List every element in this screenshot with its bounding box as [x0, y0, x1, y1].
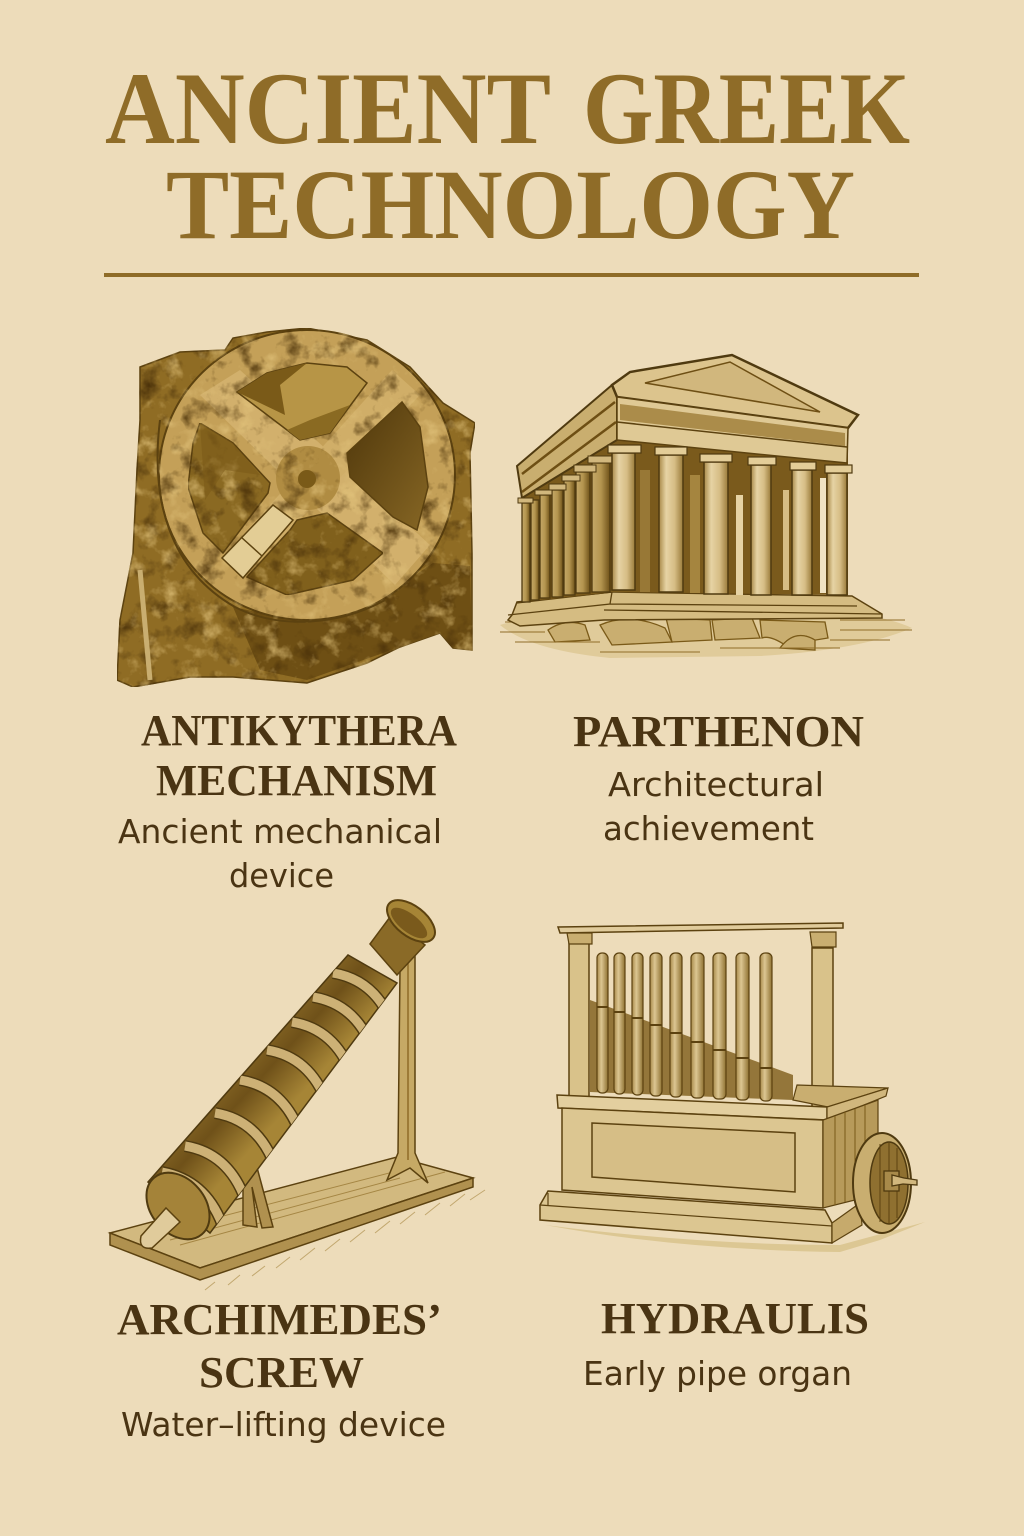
dark interior	[522, 400, 848, 602]
steps	[508, 592, 882, 626]
top surface	[793, 1085, 888, 1107]
description: Antikythera: Ancient mechanical	[118, 812, 442, 851]
box side	[823, 1100, 878, 1208]
title: GREEK	[583, 52, 910, 166]
pipes	[597, 953, 772, 1101]
description: Parthenon: Architectural	[608, 765, 824, 804]
right window	[347, 402, 428, 530]
description: Hydraulis: Early pipe organ	[583, 1354, 852, 1393]
slab	[557, 1095, 827, 1120]
pediment	[612, 355, 858, 428]
floor shadow	[545, 1222, 925, 1252]
description line 2: device	[229, 856, 334, 895]
plinth	[540, 1191, 832, 1243]
title	[105, 52, 910, 260]
post	[387, 953, 428, 1183]
panel: Parthenon	[500, 355, 912, 848]
heading: Hydraulis: HYDRAULIS	[601, 1294, 869, 1343]
tube body	[148, 955, 397, 1233]
front columns	[612, 453, 847, 595]
heading: Parthenon: PARTHENON	[573, 707, 864, 756]
wheel	[853, 1133, 911, 1233]
description line 2: achievement	[603, 809, 814, 848]
icon: water organ	[540, 923, 925, 1252]
front support	[243, 1160, 273, 1228]
top window	[237, 363, 367, 440]
panel: Archimedes' screw	[110, 892, 485, 1444]
ground and rocks	[500, 612, 912, 658]
frieze and architrave	[617, 397, 848, 463]
icon: temple	[500, 355, 912, 658]
side colonnade	[522, 463, 610, 602]
panel: Hydraulis	[540, 923, 925, 1393]
base board	[110, 1157, 473, 1268]
title: ANCIENT	[105, 52, 551, 166]
panel: Antikythera mechanism	[117, 328, 475, 895]
top bar	[558, 923, 843, 933]
heading: Archimedes': ARCHIMEDES’	[117, 1295, 442, 1344]
title: TECHNOLOGY	[166, 149, 855, 260]
heading: Antikythera: ANTIKYTHERA	[141, 706, 457, 755]
posts	[569, 940, 589, 1098]
side entablature	[517, 385, 617, 498]
icon: screw on stand	[110, 892, 485, 1290]
rod	[140, 1208, 180, 1248]
end cap	[134, 1160, 222, 1252]
icon: corroded bronze mechanism	[117, 328, 475, 687]
heading: Mechanism: MECHANISM	[156, 756, 437, 805]
description: screw: Water–lifting device	[121, 1405, 446, 1444]
left window	[188, 423, 270, 553]
box front	[562, 1108, 823, 1208]
rear panel	[590, 1000, 793, 1100]
heading: Screw: SCREW	[199, 1348, 364, 1397]
highlighted spoke	[222, 505, 293, 578]
bottom window	[247, 513, 383, 595]
tube neck and flange	[370, 917, 425, 975]
